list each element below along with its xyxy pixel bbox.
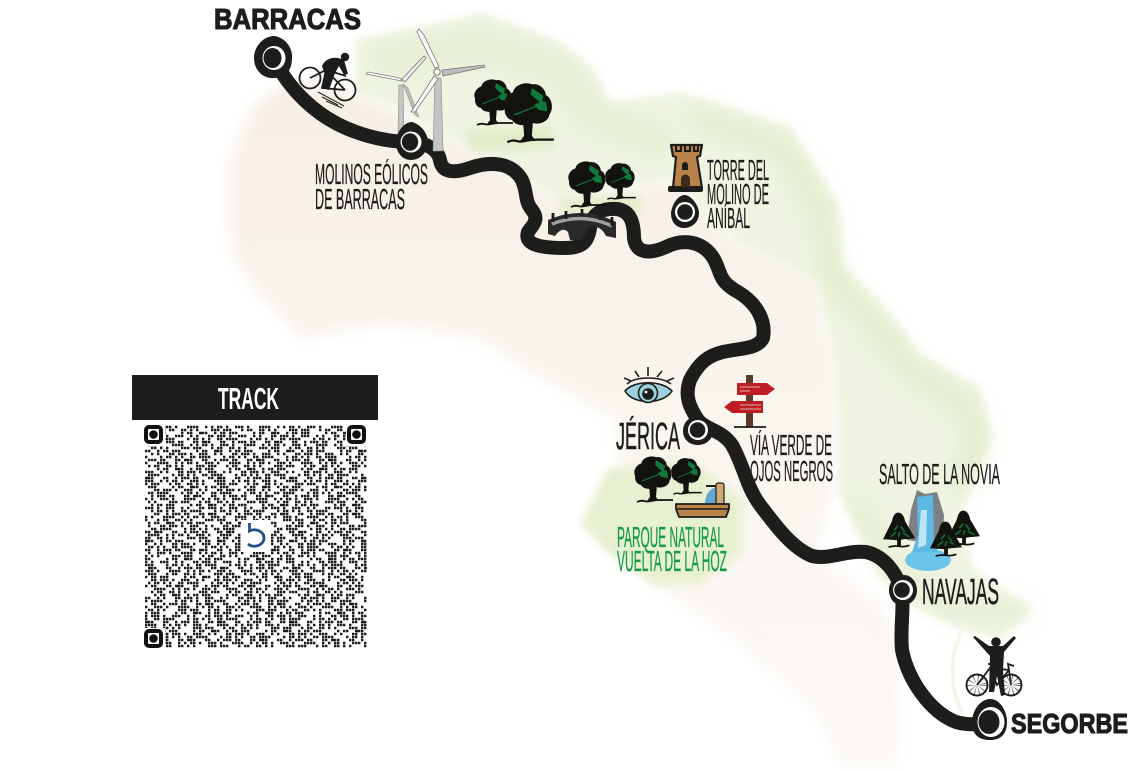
label: Parque Natural Vuelta de la Hoz: [617, 522, 727, 578]
marker: Jérica: [683, 416, 713, 445]
marker: Molinos eólicos: [396, 122, 428, 160]
QR code: [144, 425, 367, 648]
label: Torre del Molino de Aníbal: ANÍBAL: [707, 202, 750, 235]
marker: Torre del Molino: [671, 195, 699, 228]
text: MOLINOS EÓLICOS: [315, 158, 428, 191]
wash: park green: [580, 458, 743, 585]
marker: Segorbe: [972, 699, 1007, 740]
route line: [273, 57, 990, 724]
label: Torre del Molino de Aníbal: [707, 155, 769, 235]
text: TORRE DEL: [707, 155, 769, 187]
marker: Barracas: [254, 36, 292, 78]
icon: fountain: [676, 483, 729, 517]
text: VUELTA DE LA HOZ: [617, 546, 727, 578]
wash: green patches behind trees: [466, 126, 642, 214]
heading bar: Track: TRACK: [218, 381, 279, 416]
text: PARQUE NATURAL: [617, 522, 724, 554]
wash: green ridge darker bands: [385, 45, 1020, 612]
icon: tower: [668, 145, 703, 192]
icon: oak trees Jérica: [635, 457, 702, 502]
icon: waterfall with pines: [884, 490, 979, 571]
icon: cyclist celebrating: [966, 636, 1022, 696]
heading bar: Track: [132, 375, 378, 420]
icon: cyclist descending: [300, 53, 356, 108]
icon: stone bridge: [548, 209, 616, 240]
icon: oak trees middle: [569, 162, 636, 207]
icon: wind turbines: [366, 29, 485, 151]
text: JÉRICA: [616, 415, 680, 458]
wash: beige terrain: [228, 82, 897, 767]
text: NAVAJAS: [922, 571, 999, 612]
wash: green ridge: [355, 12, 1033, 640]
marker: Navajas: [889, 575, 917, 605]
text: VÍA VERDE DE: [750, 429, 832, 462]
label: Vía Verde de Ojos Negros: [750, 429, 833, 488]
text: OJOS NEGROS: [750, 456, 833, 488]
background: watercolor map washes: [228, 12, 1033, 767]
QR finder marks: [146, 427, 364, 646]
icon: signpost: [724, 375, 775, 427]
place name: Barracas: BARRACAS: [214, 4, 361, 36]
QR centre logo: [248, 523, 264, 546]
panel: track QR: [94, 375, 378, 650]
label: Molinos eólicos de Barracas: DE BARRACAS: [315, 184, 405, 216]
label: Molinos eólicos de Barracas: [315, 158, 428, 216]
wash: faint arc near Segorbe: [953, 630, 985, 738]
text: MOLINO DE: [707, 179, 769, 211]
icon: eye: [624, 367, 674, 402]
icon: oak trees top: [475, 80, 554, 142]
